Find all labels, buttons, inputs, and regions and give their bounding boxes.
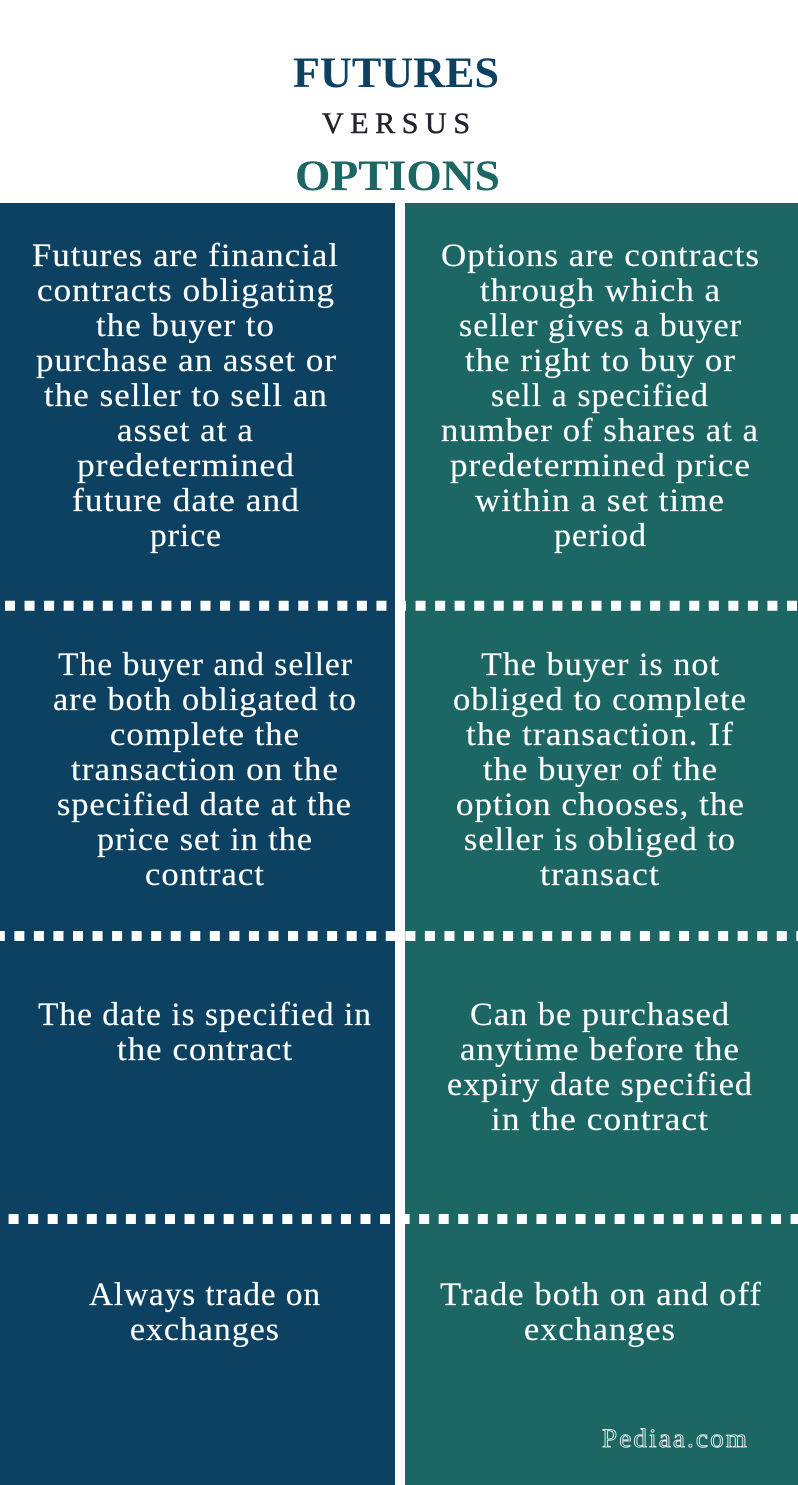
text: options definition: the right to buy or: [465, 343, 736, 379]
text: futures exchanges: [89, 1277, 321, 1348]
text: futures definition: purchase an asset or: [36, 343, 337, 379]
text: options obligation: obliged to complete: [453, 682, 747, 718]
text: options date: Can be purchased: [470, 997, 730, 1033]
text: options exchanges: exchanges: [524, 1312, 676, 1348]
text: options date: anytime before the: [460, 1032, 740, 1068]
heading: futures: FUTURES: [293, 50, 499, 97]
text: options obligation: transact: [540, 857, 660, 893]
text: futures definition: the buyer to: [96, 308, 275, 344]
logo: pediaa.com: Pediaa.com: [602, 1424, 749, 1453]
text: options obligation: The buyer is not: [481, 647, 720, 683]
heading: versus: VERSUS: [322, 107, 470, 140]
panel: futures column: [0, 203, 395, 1485]
text: options definition: through which a: [480, 273, 721, 309]
text: options exchanges: [440, 1277, 762, 1348]
text: options date: expiry date specified: [447, 1067, 753, 1103]
text: futures definition: contracts obligating: [37, 273, 335, 309]
text: futures definition: predetermined: [77, 448, 295, 484]
text: futures definition: price: [150, 518, 222, 554]
text: futures date: the contract: [117, 1032, 293, 1068]
text: options definition: sell a specified: [491, 378, 709, 414]
text: futures obligation: complete the: [110, 717, 300, 753]
text: options date: [447, 997, 753, 1138]
text: options exchanges: Trade both on and off: [440, 1277, 762, 1313]
title: futures versus options: [293, 50, 500, 200]
text: futures obligation: transaction on the: [71, 752, 339, 788]
text: options definition: predetermined price: [450, 448, 751, 484]
text: futures exchanges: exchanges: [130, 1312, 280, 1348]
text: futures definition: Futures are financial: [32, 238, 339, 274]
text: futures obligation: specified date at the: [57, 787, 352, 823]
text: options obligation: seller is obliged to: [464, 822, 736, 858]
text: futures obligation: The buyer and seller: [58, 647, 353, 683]
text: options definition: period: [554, 518, 647, 554]
heading: options: OPTIONS: [295, 153, 500, 200]
text: options definition: [441, 238, 760, 554]
text: options obligation: option chooses, the: [456, 787, 745, 823]
panel: options column: [405, 203, 798, 1485]
text: options definition: Options are contracts: [441, 238, 760, 274]
text: futures definition: [32, 238, 339, 554]
text: futures definition: the seller to sell an: [44, 378, 328, 414]
text: options definition: seller gives a buyer: [459, 308, 742, 344]
text: options obligation: the buyer of the: [483, 752, 718, 788]
text: options definition: within a set time: [475, 483, 725, 519]
text: options obligation: [453, 647, 747, 893]
text: futures obligation: contract: [145, 857, 265, 893]
text: futures exchanges: Always trade on: [89, 1277, 321, 1313]
text: futures obligation: are both obligated to: [53, 682, 357, 718]
text: futures definition: future date and: [72, 483, 300, 519]
text: futures obligation: price set in the: [97, 822, 313, 858]
text: futures definition: asset at a: [117, 413, 254, 449]
text: futures date: [38, 997, 372, 1068]
text: options obligation: the transaction. If: [466, 717, 734, 753]
text: options definition: number of shares at a: [441, 413, 759, 449]
text: futures date: The date is specified in: [38, 997, 372, 1033]
text: options date: in the contract: [491, 1102, 709, 1138]
text: futures obligation: [53, 647, 357, 893]
